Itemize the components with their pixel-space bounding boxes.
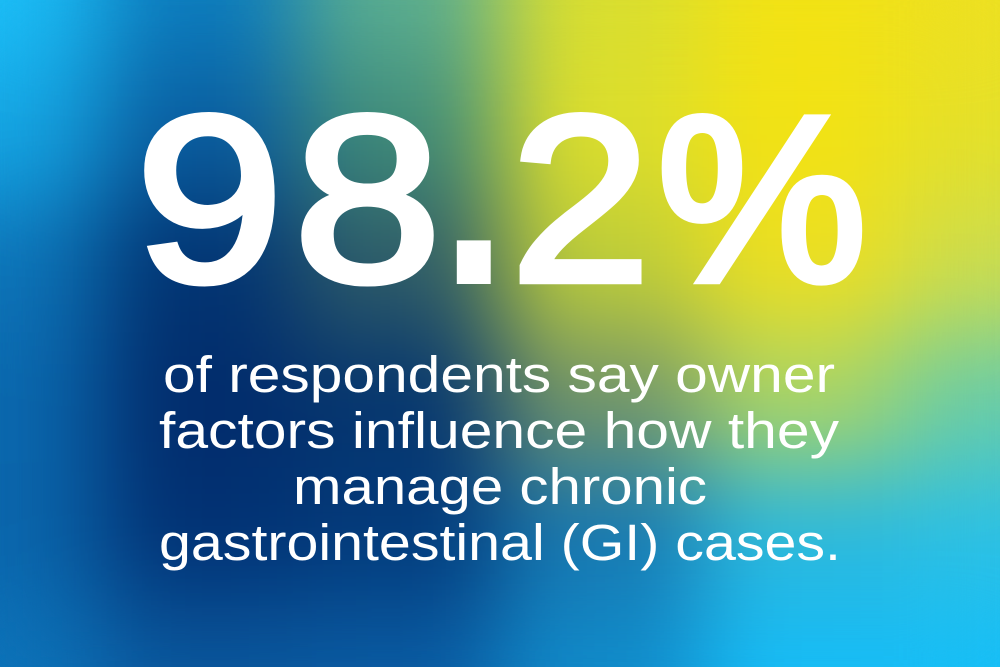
headline statistic: [136, 18, 867, 346]
headline statistic: 8: [294, 68, 441, 331]
description text: gastrointestinal (GI) cases.: [159, 514, 841, 571]
headline statistic: 9: [136, 68, 283, 331]
description text: of respondents say owner: [163, 346, 835, 403]
description text: manage chronic: [293, 458, 707, 515]
description text: [159, 346, 841, 571]
headline statistic: 2: [511, 67, 650, 331]
headline statistic: %: [657, 68, 867, 332]
description text: factors influence how they: [159, 402, 840, 459]
headline statistic: .: [440, 18, 507, 346]
